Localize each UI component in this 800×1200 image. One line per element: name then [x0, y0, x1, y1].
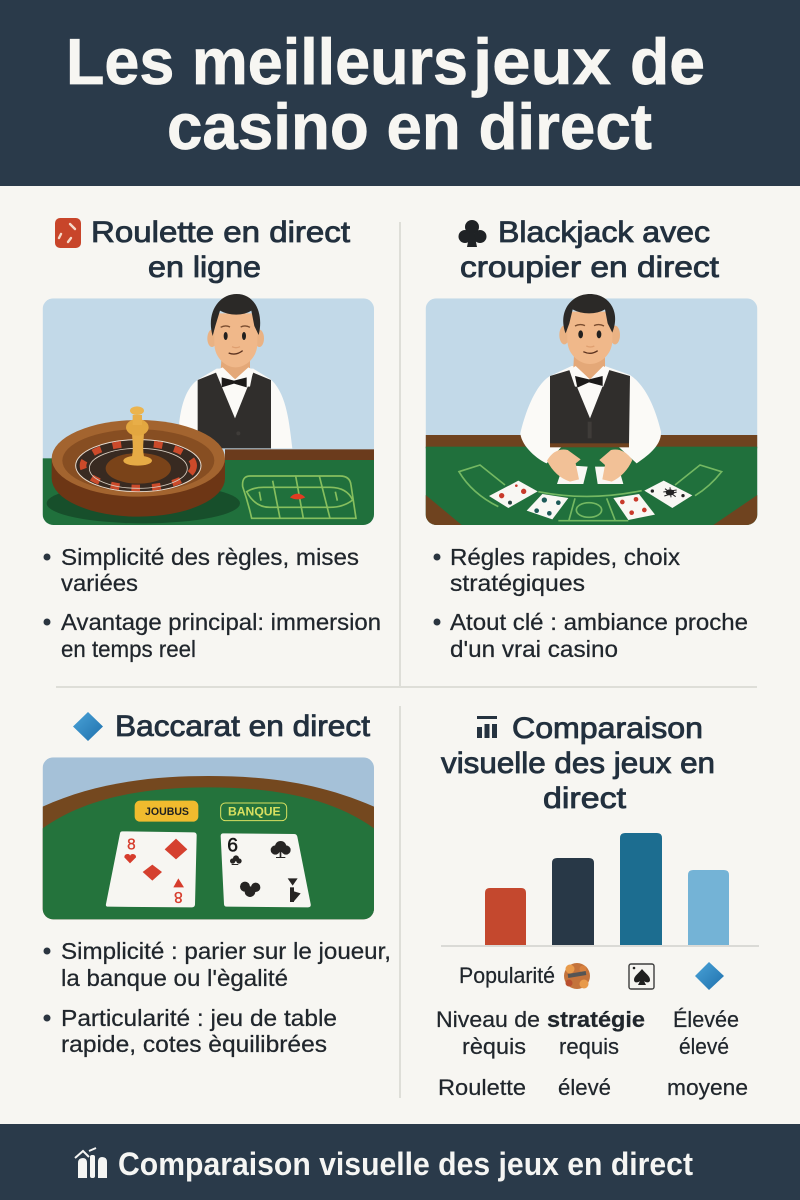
- card: black six: [221, 833, 311, 907]
- heading: blackjack: Blackjack avec: [498, 216, 710, 249]
- icon row: Popularité: [459, 963, 555, 988]
- icon: red die: [55, 218, 81, 248]
- tag: banque: BANQUE: [228, 805, 281, 819]
- bullets: baccarat: rapide, cotes èquilibrées: [61, 1031, 327, 1057]
- icon: small bar chart: [477, 716, 497, 738]
- heading: roulette: [91, 216, 351, 284]
- playing cards: [489, 481, 692, 520]
- title: de: [630, 25, 705, 98]
- icon: spade card: [629, 964, 654, 989]
- title: casino en direct: [167, 90, 652, 163]
- bullets: blackjack: stratégiques: [450, 570, 585, 596]
- bullets: blackjack: d'un vrai casino: [450, 636, 618, 662]
- bullets: roulette: Simplicité des règles, mises: [61, 544, 359, 570]
- card: red eight: 8: [174, 888, 183, 905]
- icon row: [459, 962, 724, 990]
- bar chart: [441, 833, 759, 946]
- tag: joueurs: JOUBUS: [145, 806, 189, 818]
- comparison table text: requis: [559, 1034, 619, 1059]
- bullets: baccarat: Simplicité : parier sur le joueur,: [61, 938, 391, 964]
- dealer hands and cards: [547, 450, 632, 484]
- bullets: roulette: en temps reel: [61, 636, 196, 662]
- dealer: [520, 294, 661, 463]
- icon: club: [458, 220, 486, 247]
- bullets: baccarat: la banque ou l'ègalité: [61, 965, 288, 991]
- dealer: [179, 294, 292, 448]
- icon: blue diamond: [695, 962, 724, 990]
- illustration: baccarat table: [43, 757, 374, 919]
- comparison table text: Niveau de: [436, 1007, 540, 1032]
- title: jeux: [471, 25, 611, 98]
- tag: joueurs: [135, 801, 198, 822]
- roulette wheel: [52, 406, 225, 517]
- heading: comparison: [441, 712, 715, 815]
- title: Les meilleurs: [66, 25, 468, 98]
- panel: roulette: [43, 216, 381, 662]
- bullets: roulette: [44, 544, 381, 662]
- comparison table text: stratégie: [547, 1007, 645, 1032]
- comparison table text: rèquis: [462, 1034, 526, 1059]
- card: red eight: 8: [127, 836, 136, 853]
- bullets: roulette: variées: [61, 570, 138, 596]
- footer text: Comparaison visuelle des jeux en direct: [118, 1146, 693, 1182]
- bullets: blackjack: [434, 544, 748, 662]
- icon: blue diamond: [73, 712, 103, 741]
- betting layout: [243, 476, 356, 518]
- bullets: baccarat: Particularité : jeu de table: [61, 1005, 337, 1031]
- title: [66, 25, 705, 163]
- icon: footer chart: [75, 1148, 107, 1178]
- heading: comparison: Comparaison: [512, 712, 703, 745]
- illustration: blackjack dealer and cards: [426, 294, 757, 525]
- heading: blackjack: croupier en direct: [460, 251, 720, 284]
- card: red eight: [106, 831, 197, 907]
- bullets: blackjack: Régles rapides, choix: [450, 544, 681, 570]
- icon: roulette chip cluster: [564, 963, 590, 989]
- comparison table text: [436, 1007, 748, 1100]
- footer band: [0, 1124, 800, 1200]
- bullets: blackjack: Atout clé : ambiance proche: [450, 609, 748, 635]
- panel: comparison: [436, 712, 759, 1100]
- header band: [0, 0, 800, 186]
- comparison table text: élevé: [558, 1075, 611, 1100]
- card: black six: 6: [227, 835, 238, 856]
- comparison table text: Élevée: [673, 1007, 739, 1032]
- bullets: roulette: Avantage principal: immersion: [61, 609, 381, 635]
- bullets: baccarat: [44, 938, 391, 1057]
- comparison table text: moyene: [667, 1075, 748, 1100]
- heading: comparison: visuelle des jeux en: [441, 747, 715, 780]
- heading: roulette: en ligne: [148, 251, 261, 284]
- comparison table text: élevé: [679, 1034, 729, 1059]
- panel: baccarat: [43, 710, 391, 1057]
- heading: roulette: Roulette en direct: [91, 216, 351, 249]
- heading: blackjack: [460, 216, 720, 284]
- panel: blackjack: [426, 216, 757, 662]
- comparison table text: Roulette: [438, 1075, 526, 1100]
- heading: comparison: direct: [543, 782, 627, 815]
- heading: baccarat: Baccarat en direct: [115, 710, 371, 743]
- table markings: [459, 465, 722, 521]
- illustration: roulette dealer and wheel: [43, 294, 374, 525]
- tag: banque: [221, 803, 287, 821]
